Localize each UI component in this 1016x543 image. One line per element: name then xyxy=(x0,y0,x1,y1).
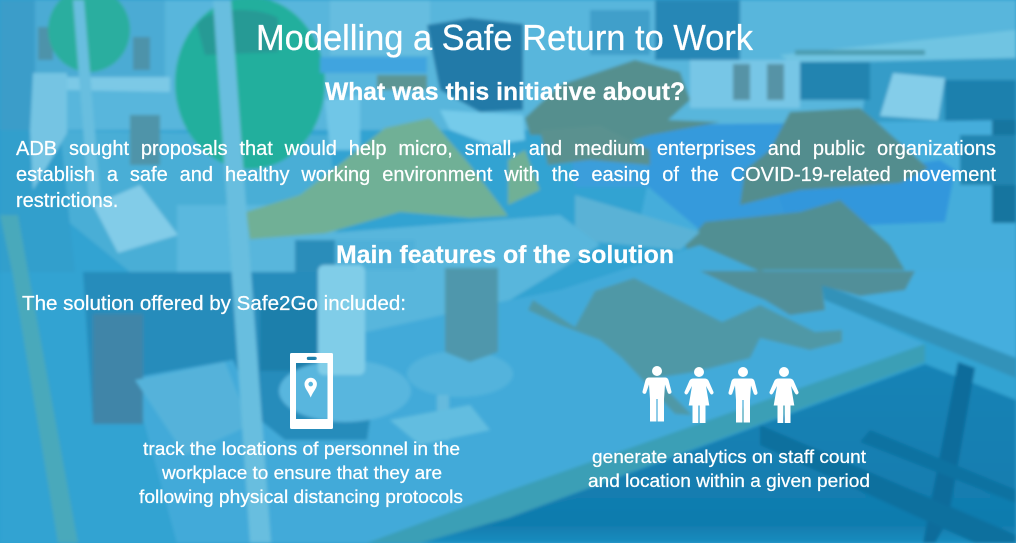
text: generate analytics: and location within a given period xyxy=(588,471,870,491)
back right table xyxy=(640,120,1016,300)
dark under-table area at left xyxy=(83,272,370,440)
upper workshop xyxy=(0,0,1016,130)
front-left machinery xyxy=(0,130,340,272)
shirt on table xyxy=(528,278,842,415)
text: track locations: track the locations of personnel in the xyxy=(143,439,460,459)
spools and discs xyxy=(279,360,411,422)
text: initiative description paragraph: ADB sought proposals that would help micro, small, and medium enterprises and public organizations xyxy=(16,138,996,160)
icon: four people xyxy=(642,366,799,423)
front sewing table xyxy=(132,245,925,543)
yellow floor line xyxy=(0,215,78,543)
text: initiative description paragraph: restrictions. xyxy=(16,190,118,212)
icon: phone with location pin xyxy=(290,353,333,429)
text: solution intro: The solution offered by Safe2Go included: xyxy=(22,292,406,315)
text: initiative description paragraph: establish a safe and healthy working environment with the easing of the COVID-19-related movement xyxy=(16,164,996,186)
text: track locations: following physical distancing protocols xyxy=(139,487,463,507)
text: track locations: workplace to ensure that they are xyxy=(161,463,442,483)
poles xyxy=(213,0,271,543)
text: track locations xyxy=(139,439,463,507)
papers xyxy=(390,405,490,445)
table edge & dark under-table xyxy=(400,364,1016,543)
green signs xyxy=(48,0,130,72)
text: generate analytics: generate analytics on staff count xyxy=(592,447,866,467)
title: Modelling a Safe Return to Work xyxy=(256,17,754,58)
brown shirts and baskets xyxy=(640,123,830,230)
heading: main features of the solution: Main features of the solution xyxy=(336,241,674,269)
worker xyxy=(320,57,427,73)
text: generate analytics xyxy=(588,447,870,491)
heading: what was this initiative about: What was this initiative about? xyxy=(325,78,685,106)
text: initiative description paragraph xyxy=(16,138,996,212)
